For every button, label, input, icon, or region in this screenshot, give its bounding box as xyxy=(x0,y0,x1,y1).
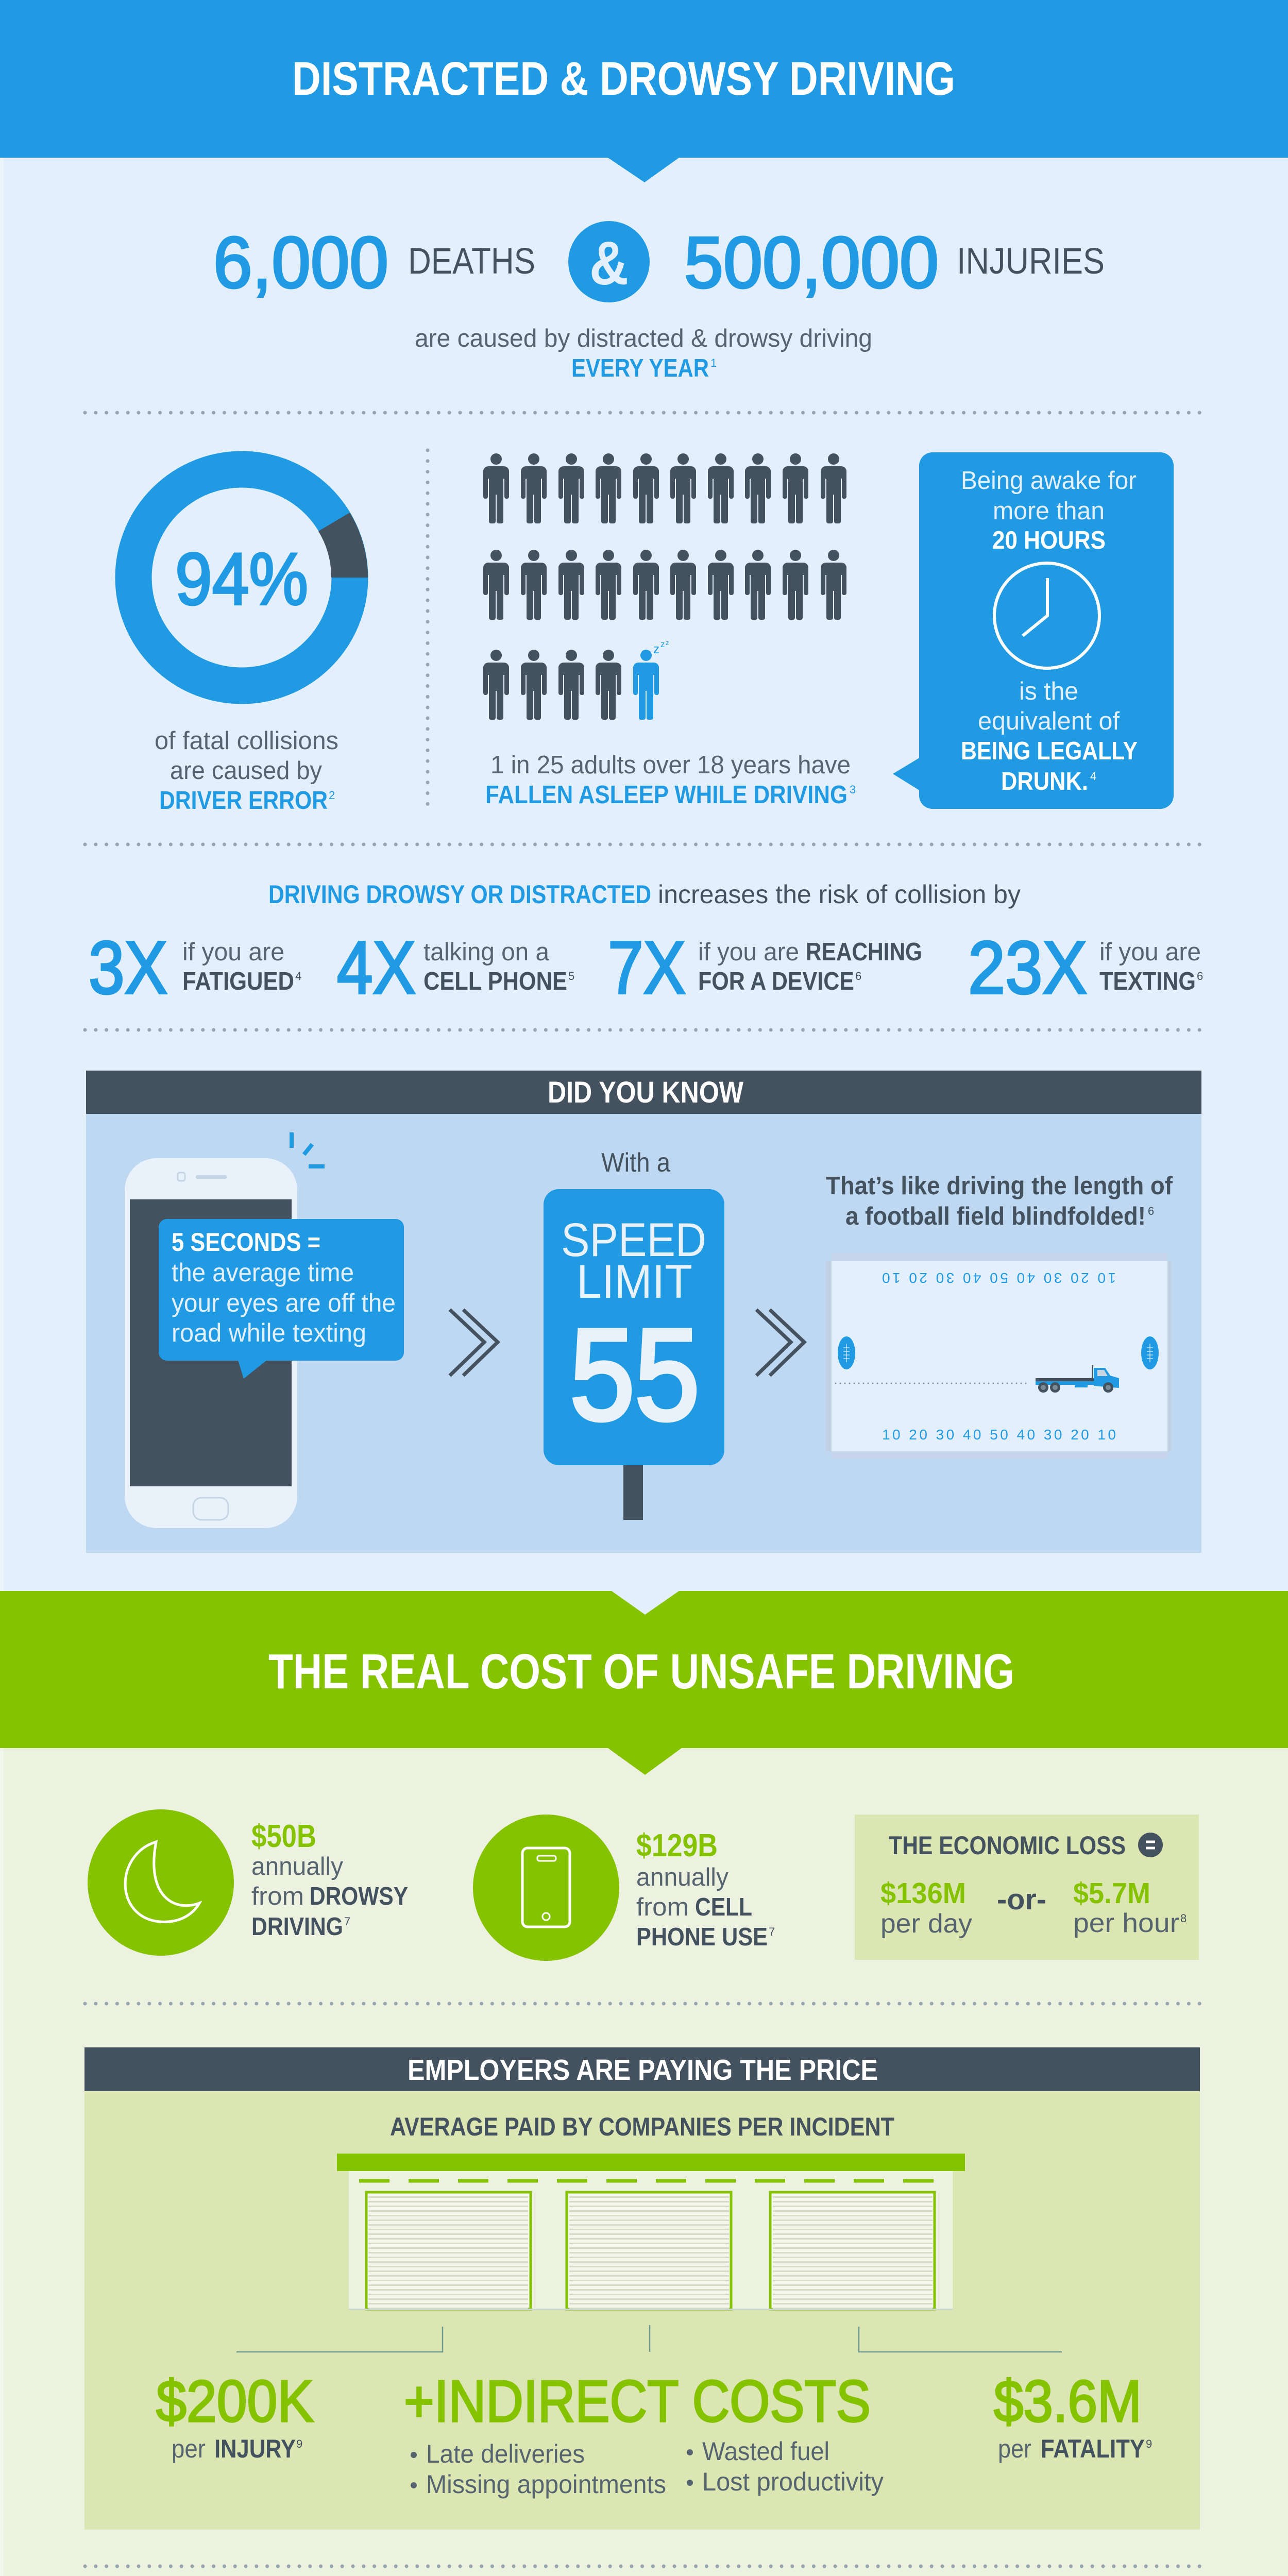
donut caption xyxy=(155,727,338,815)
stat: per fatality: per xyxy=(998,2434,1031,2463)
stat: drowsy driving cost: $50B xyxy=(251,1819,316,1854)
risk 7X reaching: if you are xyxy=(698,938,799,966)
panel: economic loss: per day xyxy=(880,1909,972,1939)
donut caption: are caused by xyxy=(170,757,322,785)
panel: economic loss: THE ECONOMIC LOSS xyxy=(889,1831,1126,1860)
risk 7X reaching xyxy=(608,926,922,1009)
every year: EVERY YEAR xyxy=(571,354,709,382)
stat: cell phone use cost xyxy=(636,1828,775,1951)
risk 3X fatigued: 4 xyxy=(295,970,301,982)
panel: economic loss: $136M xyxy=(880,1877,966,1910)
indirect costs: +INDIRECT COSTS xyxy=(404,2369,871,2434)
speech bubble: 5 seconds: the average time xyxy=(172,1258,354,1287)
stat: cell phone use cost: from xyxy=(636,1893,689,1921)
stat: drowsy driving cost xyxy=(251,1819,408,1941)
subheading: AVERAGE PAID BY COMPANIES PER INCIDENT xyxy=(390,2112,894,2141)
header banner xyxy=(0,0,1288,182)
headline statistics xyxy=(213,221,1105,382)
risk 23X texting: 23X xyxy=(968,926,1087,1009)
arrow: chevrons left xyxy=(450,1310,498,1376)
risk 3X fatigued xyxy=(89,926,301,1009)
callout: awake for 20 hours: Being awake for xyxy=(961,467,1137,495)
injuries label: INJURIES xyxy=(957,241,1105,282)
people pictogram: 1 in 25: z xyxy=(660,639,665,649)
risk 23X texting: if you are xyxy=(1099,938,1201,966)
yard numbers bottom: 10 20 30 40 50 40 30 20 10 xyxy=(882,1427,1116,1443)
risk 3X fatigued: 3X xyxy=(89,926,167,1009)
people caption: FALLEN ASLEEP WHILE DRIVING xyxy=(485,781,848,809)
risk heading: DRIVING DROWSY OR DISTRACTED xyxy=(268,880,651,909)
panel heading: EMPLOYERS ARE PAYING THE PRICE xyxy=(408,2054,878,2087)
risk 23X texting: 6 xyxy=(1197,970,1203,982)
ampersand badge: & xyxy=(589,229,629,298)
callout: awake for 20 hours: DRUNK. xyxy=(1001,768,1088,795)
speed limit sign xyxy=(544,1189,724,1520)
callout: awake for 20 hours: BEING LEGALLY xyxy=(961,737,1138,765)
stat: cell phone use cost: $129B xyxy=(636,1828,718,1863)
donut chart: 94 percent: 94% xyxy=(175,538,308,620)
arrow: chevrons right xyxy=(756,1310,804,1376)
people pictogram: 1 in 25: z xyxy=(653,642,659,656)
risk heading: increases the risk of collision by xyxy=(658,880,1021,909)
stat: per injury xyxy=(156,2369,314,2463)
deaths label: DEATHS xyxy=(408,241,535,282)
title: DISTRACTED & DROWSY DRIVING xyxy=(292,53,955,105)
donut caption: 2 xyxy=(329,789,335,802)
panel: economic loss: $5.7M xyxy=(1073,1877,1150,1910)
stat: per injury: per xyxy=(172,2434,206,2463)
stat: cell phone use cost: 7 xyxy=(769,1925,775,1938)
indirect costs: Wasted fuel xyxy=(702,2437,829,2466)
stat: drowsy driving cost: 7 xyxy=(344,1915,350,1928)
stat: cell phone use cost: annually xyxy=(636,1863,728,1891)
football field diagram xyxy=(826,1253,1171,1459)
icon: football right xyxy=(1141,1336,1159,1369)
people caption: 3 xyxy=(850,783,856,796)
indirect costs: Missing appointments xyxy=(426,2470,666,2499)
risk 4X cell phone: 4X xyxy=(337,926,416,1009)
subhead: are caused by distracted & drowsy driving xyxy=(415,325,872,352)
callout: awake for 20 hours: is the xyxy=(1019,677,1078,705)
indirect costs: Lost productivity xyxy=(702,2467,884,2496)
indirect costs: Late deliveries xyxy=(426,2439,585,2468)
every year: 1 xyxy=(710,357,717,369)
football field caption xyxy=(826,1172,1173,1230)
connector lines xyxy=(236,2325,1062,2352)
risk 3X fatigued: if you are xyxy=(182,938,284,966)
speech bubble: 5 seconds: your eyes are off the xyxy=(172,1289,396,1317)
speech bubble: 5 seconds: road while texting xyxy=(172,1318,366,1347)
risk 4X cell phone xyxy=(337,926,574,1009)
stat: per fatality: $3.6M xyxy=(994,2369,1142,2434)
speed limit sign: 55 xyxy=(570,1302,700,1447)
risk 23X texting xyxy=(968,926,1203,1009)
risk 3X fatigued: FATIGUED xyxy=(182,968,294,995)
risk 7X reaching: FOR A DEVICE xyxy=(698,968,854,995)
icon: clock xyxy=(994,563,1099,668)
section banner: real cost xyxy=(0,1591,1288,1775)
people caption: 1 in 25 adults over 18 years have xyxy=(490,751,851,779)
risk 7X reaching: 7X xyxy=(608,926,686,1009)
stat: per injury: $200K xyxy=(156,2369,314,2434)
callout: awake for 20 hours xyxy=(893,452,1174,809)
donut caption: DRIVER ERROR xyxy=(159,787,328,815)
panel: economic loss: -or- xyxy=(997,1883,1046,1916)
people pictogram: 1 in 25: z xyxy=(666,639,669,647)
risk 4X cell phone: talking on a xyxy=(423,938,550,966)
stat: drowsy driving cost: DRIVING xyxy=(251,1913,343,1941)
risk 7X reaching: 6 xyxy=(855,970,861,982)
stat: per fatality: 9 xyxy=(1146,2437,1152,2450)
stat: per fatality: FATALITY xyxy=(1041,2434,1145,2463)
callout: awake for 20 hours: 4 xyxy=(1090,770,1096,783)
icon: equals badge xyxy=(1138,1833,1163,1857)
panel: did you know xyxy=(86,1071,1201,1553)
risk heading xyxy=(268,880,1021,909)
stat: drowsy driving cost: from xyxy=(251,1883,304,1910)
football field caption: 6 xyxy=(1148,1205,1154,1217)
speed limit sign: LIMIT xyxy=(577,1256,692,1308)
football field caption: That’s like driving the length of xyxy=(826,1172,1173,1200)
risk 23X texting: TEXTING xyxy=(1099,968,1196,995)
section title: THE REAL COST OF UNSAFE DRIVING xyxy=(268,1644,1014,1699)
with a label: With a xyxy=(601,1148,670,1178)
people caption xyxy=(485,751,856,809)
stat: drowsy driving cost: annually xyxy=(251,1853,343,1880)
panel: economic loss xyxy=(855,1815,1199,1960)
speech bubble: 5 seconds xyxy=(159,1219,404,1379)
callout: awake for 20 hours: equivalent of xyxy=(978,707,1120,735)
panel: economic loss: per hour xyxy=(1073,1908,1179,1938)
stat: drowsy driving cost: DROWSY xyxy=(310,1883,408,1910)
panel: economic loss: 8 xyxy=(1180,1912,1187,1925)
callout: awake for 20 hours: 20 HOURS xyxy=(992,527,1106,554)
panel heading: DID YOU KNOW xyxy=(548,1076,743,1109)
people pictogram: 1 in 25 xyxy=(483,453,846,720)
icon: moon xyxy=(88,1809,234,1956)
icon: small truck xyxy=(1036,1365,1119,1393)
deaths number: 6,000 xyxy=(213,222,388,303)
speed limit sign: SPEED xyxy=(561,1214,706,1266)
ampersand badge xyxy=(568,221,650,302)
injuries number: 500,000 xyxy=(684,222,939,303)
donut chart: 94 percent xyxy=(133,469,368,686)
risk 4X cell phone: CELL PHONE xyxy=(423,968,567,995)
icon: warehouse xyxy=(337,2154,965,2310)
football field caption: a football field blindfolded! xyxy=(845,1202,1146,1230)
stat: cell phone use cost: CELL xyxy=(695,1893,752,1921)
yard numbers top: 10 20 30 40 50 40 30 20 10 xyxy=(882,1270,1116,1286)
risk 4X cell phone: 5 xyxy=(568,970,574,982)
icon: smartphone xyxy=(125,1132,325,1528)
indirect costs xyxy=(404,2369,884,2499)
icon: cell phone xyxy=(473,1815,619,1961)
panel: employers are paying the price xyxy=(84,2047,1200,2530)
donut caption: of fatal collisions xyxy=(155,727,338,755)
stat: cell phone use cost: PHONE USE xyxy=(636,1923,768,1951)
speech bubble: 5 seconds: 5 SECONDS = xyxy=(172,1228,320,1257)
callout: awake for 20 hours: more than xyxy=(993,497,1105,525)
stat: per fatality xyxy=(994,2369,1152,2463)
stat: per injury: INJURY xyxy=(214,2434,296,2463)
icon: football left xyxy=(838,1336,855,1369)
risk 7X reaching: REACHING xyxy=(806,938,922,966)
stat: per injury: 9 xyxy=(296,2437,302,2450)
